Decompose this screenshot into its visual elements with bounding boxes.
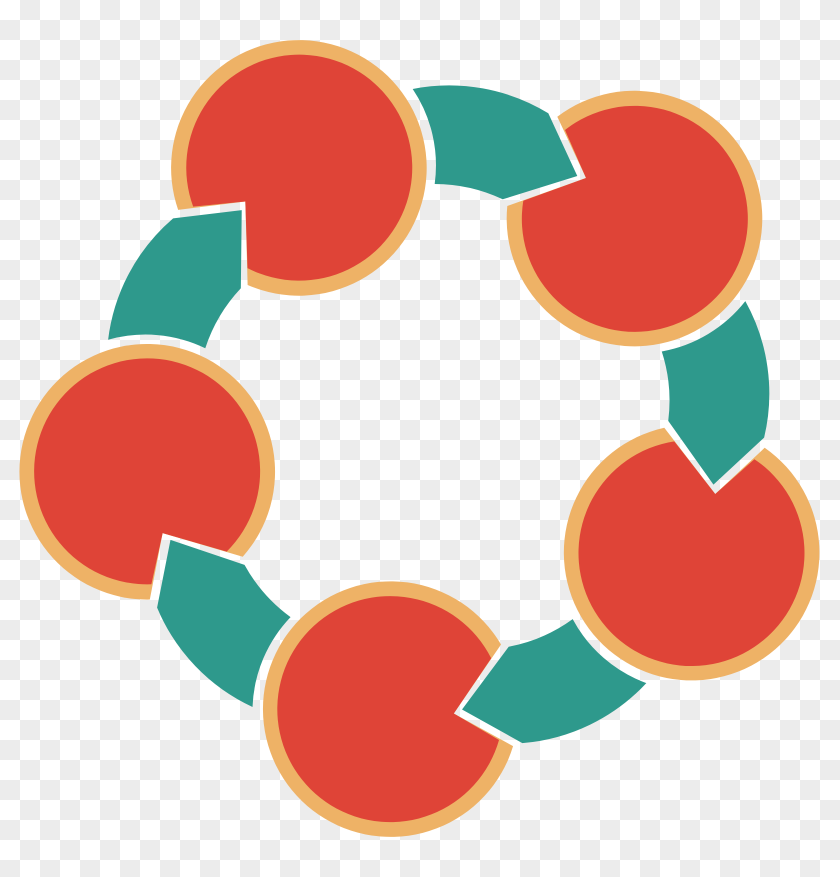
arrow: upper left, circle 5 to circle 1 <box>105 182 264 374</box>
circle 4: bottom <box>212 531 569 877</box>
arrow: top, circle 1 to circle 2 <box>413 85 577 199</box>
circle 3: lower right <box>531 392 840 714</box>
arrow: bottom right, circle 3 to circle 4 <box>448 594 648 783</box>
circle 2: upper right <box>507 91 762 346</box>
arrow: right, circle 2 to circle 3 <box>640 300 800 492</box>
arrow: bottom left, circle 4 to circle 5 <box>117 521 317 710</box>
circle 1: top <box>138 7 460 329</box>
circle 5: left <box>0 293 326 650</box>
